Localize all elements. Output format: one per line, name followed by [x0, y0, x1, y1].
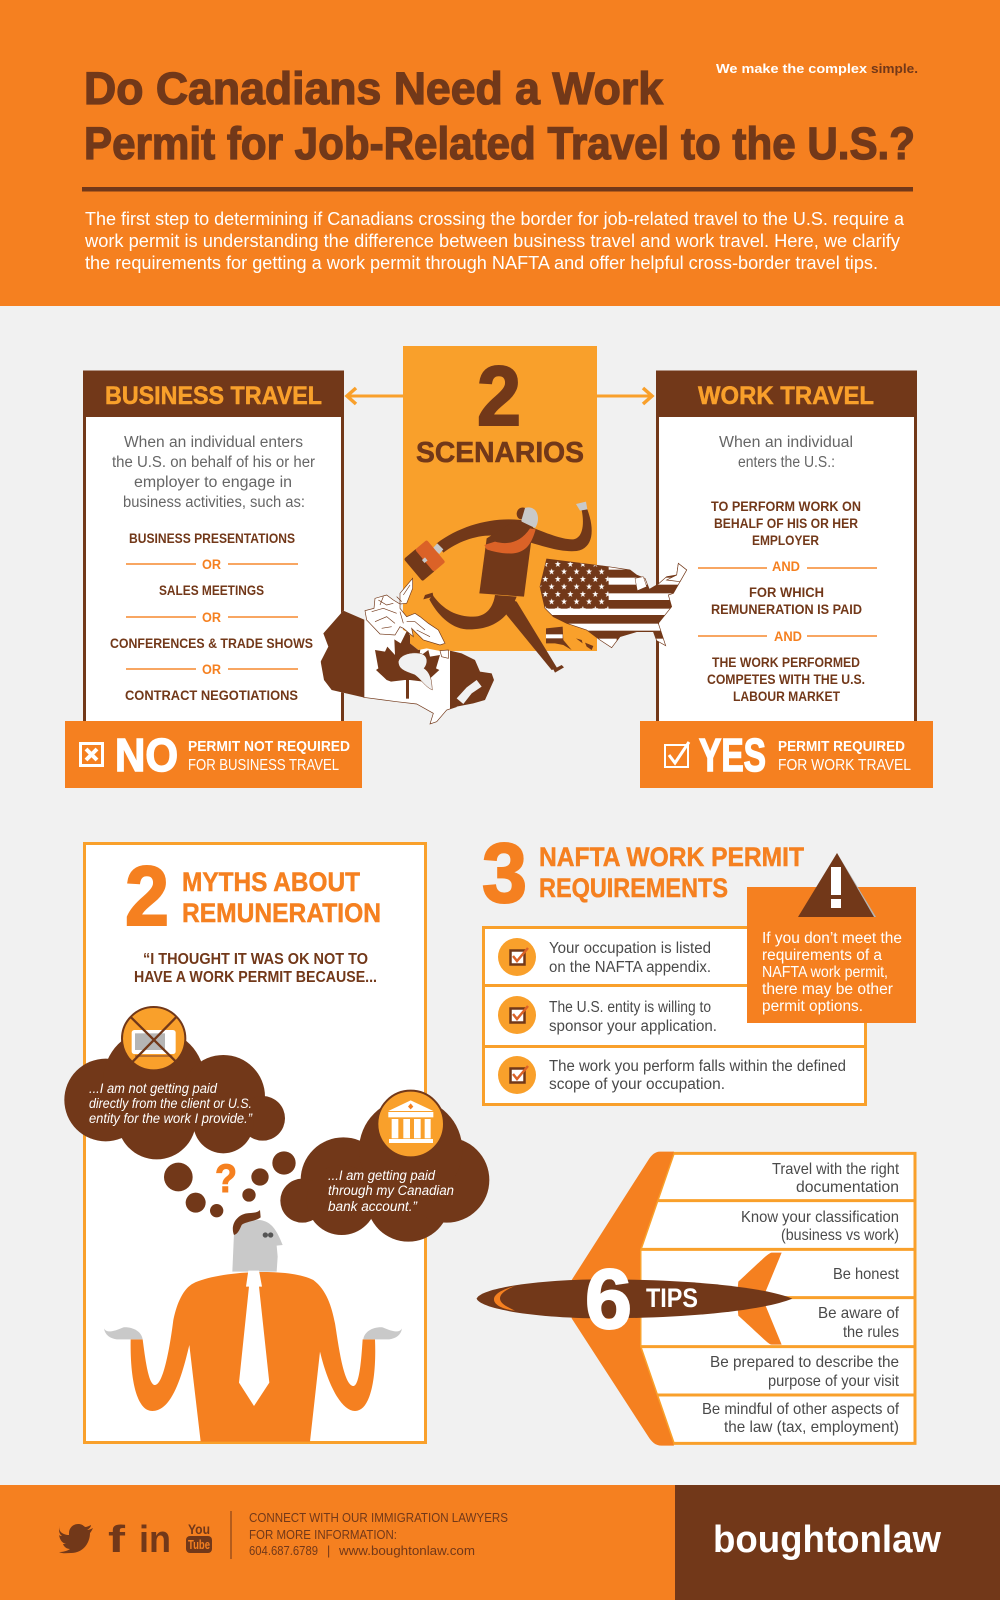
tip four: Be aware of	[818, 1305, 900, 1322]
myths quote: “I THOUGHT IT WAS OK NOT TO	[143, 951, 368, 968]
illustration: canada flag map	[317, 578, 500, 727]
myths quote	[134, 951, 377, 986]
number 6: 6	[585, 1252, 632, 1346]
right arm	[527, 509, 592, 551]
tagline: We make the complex	[716, 61, 868, 76]
panel: myths about remuneration	[84, 844, 426, 1442]
callout text: requirements of a	[762, 947, 882, 964]
no label: NO	[115, 729, 178, 781]
cloud: myth one	[64, 1029, 285, 1159]
work travel conditions: COMPETES WITH THE U.S.	[707, 672, 865, 687]
icon: youtube: Tube	[188, 1537, 210, 1552]
icon: youtube	[186, 1521, 212, 1553]
heading: business travel: BUSINESS TRAVEL	[105, 382, 322, 410]
myths heading	[182, 867, 381, 928]
icon: twitter	[59, 1524, 93, 1553]
left hand	[104, 1327, 143, 1339]
contact text: 604.687.6789	[249, 1544, 318, 1558]
icon: check box	[665, 742, 689, 767]
business activities list: BUSINESS PRESENTATIONS	[129, 531, 295, 546]
business travel description	[112, 434, 315, 511]
tip five: Be prepared to describe the	[710, 1354, 899, 1371]
requirement two: The U.S. entity is willing to	[549, 999, 711, 1016]
tip five: purpose of your visit	[768, 1373, 900, 1390]
illustration: airplane	[477, 1152, 792, 1446]
tip six: the law (tax, employment)	[724, 1419, 899, 1436]
business travel description: the U.S. on behalf of his or her	[112, 454, 315, 471]
hair	[233, 1210, 261, 1235]
yes permit text: PERMIT REQUIRED	[778, 738, 905, 755]
tip six	[702, 1401, 900, 1436]
callout text: there may be other	[762, 981, 893, 998]
business activities list: OR	[202, 662, 221, 677]
icon: warning triangle	[798, 853, 876, 917]
arrow: to business travel	[346, 388, 403, 404]
eyes	[263, 1232, 273, 1238]
illustration: thinking man	[64, 1007, 489, 1442]
work travel conditions: TO PERFORM WORK ON	[711, 499, 861, 514]
business activities list: OR	[202, 610, 221, 625]
work travel description	[719, 434, 853, 471]
business activities list: CONFERENCES & TRADE SHOWS	[110, 636, 313, 651]
yes permit text: FOR WORK TRAVEL	[778, 757, 911, 774]
work travel conditions	[698, 499, 877, 704]
requirement three: The work you perform falls within the defined	[549, 1058, 846, 1075]
business activities list: CONTRACT NEGOTIATIONS	[125, 688, 298, 703]
contact text: www.boughtonlaw.com	[338, 1544, 475, 1558]
nafta heading: REQUIREMENTS	[539, 873, 728, 903]
panel: yes permit	[640, 721, 933, 788]
right hand	[363, 1327, 402, 1339]
panel: nafta requirements	[482, 826, 866, 1104]
work travel conditions: AND	[772, 559, 800, 574]
requirement three: scope of your occupation.	[549, 1076, 725, 1093]
title: Permit for Job-Related Travel to the U.S.?	[84, 118, 915, 169]
left arm	[437, 519, 530, 553]
panel: work travel	[656, 372, 917, 724]
tips rows	[640, 1153, 915, 1443]
contact text: CONNECT WITH OUR IMMIGRATION LAWYERS	[249, 1511, 508, 1525]
torso	[479, 522, 533, 597]
panel: no permit	[65, 721, 362, 788]
work travel conditions: BEHALF OF HIS OR HER	[714, 516, 858, 531]
tagline	[716, 61, 918, 76]
illustration: running businessman	[404, 502, 592, 673]
contact text: |	[327, 1544, 330, 1558]
tips label: TIPS	[646, 1283, 698, 1313]
myth two text: through my Canadian	[328, 1183, 454, 1198]
icon: facebook: f	[108, 1519, 125, 1561]
logo: boughtonlaw	[713, 1519, 941, 1561]
work travel conditions: THE WORK PERFORMED	[712, 655, 860, 670]
callout text	[762, 930, 902, 1015]
requirement one: Your occupation is listed	[549, 940, 711, 957]
arctic islands	[365, 578, 445, 645]
myth one text: directly from the client or U.S.	[89, 1096, 252, 1111]
panel: 2 scenarios	[403, 346, 597, 651]
panel: business travel	[83, 372, 344, 724]
tip one	[772, 1161, 900, 1196]
panel: footer	[0, 1485, 1000, 1600]
intro text: The first step to determining if Canadians crossing the border for job-related travel to the U.S. require a	[85, 208, 905, 229]
myth two text: ...I am getting paid	[328, 1168, 435, 1183]
thought bubbles	[164, 1151, 296, 1217]
title	[84, 63, 915, 169]
head	[520, 507, 538, 528]
work travel conditions: LABOUR MARKET	[733, 689, 841, 704]
business activities list: OR	[202, 557, 221, 572]
no permit text	[188, 738, 350, 774]
illustration: usa flag map	[537, 557, 690, 650]
lower hand	[433, 543, 443, 554]
intro text: the requirements for getting a work permit through NAFTA and offer helpful cross-border travel tips.	[85, 252, 878, 273]
requirement one: on the NAFTA appendix.	[549, 959, 711, 976]
callout text: NAFTA work permit,	[762, 964, 888, 981]
work travel description: When an individual	[719, 434, 853, 451]
tip three: Be honest	[833, 1266, 900, 1283]
requirements table	[483, 928, 866, 1104]
heading: work travel: WORK TRAVEL	[698, 382, 874, 410]
intro text	[84, 208, 905, 273]
front leg	[497, 595, 557, 670]
work travel description: enters the U.S.:	[738, 454, 835, 471]
tip two: Know your classification	[741, 1209, 899, 1226]
requirement three	[498, 1056, 846, 1094]
no permit text: PERMIT NOT REQUIRED	[188, 738, 350, 755]
nafta heading: NAFTA WORK PERMIT	[539, 842, 804, 872]
business travel description: business activities, such as:	[123, 494, 305, 511]
title: Do Canadians Need a Work	[84, 63, 664, 114]
scenarios heading: SCENARIOS	[416, 437, 584, 469]
contact text: FOR MORE INFORMATION:	[249, 1528, 397, 1542]
icon: youtube: You	[188, 1521, 210, 1537]
myth two text: bank account.”	[328, 1199, 417, 1214]
myths heading: REMUNERATION	[182, 898, 381, 928]
tip two: (business vs work)	[781, 1227, 899, 1244]
yes permit text	[778, 738, 911, 774]
myths heading: MYTHS ABOUT	[182, 867, 360, 897]
tip one: Travel with the right	[772, 1161, 900, 1178]
requirement one	[498, 938, 711, 976]
tip two	[741, 1209, 899, 1244]
back leg	[429, 595, 517, 629]
tip six: Be mindful of other aspects of	[702, 1401, 900, 1418]
number 3: 3	[482, 826, 527, 920]
no permit text: FOR BUSINESS TRAVEL	[188, 757, 339, 774]
question mark: ?	[215, 1157, 237, 1201]
work travel conditions: AND	[774, 629, 802, 644]
tie	[239, 1271, 269, 1406]
yes label: YES	[699, 729, 766, 781]
raised hand	[576, 502, 587, 511]
work travel conditions: EMPLOYER	[752, 533, 819, 548]
business travel description: When an individual enters	[124, 434, 303, 451]
intro text: work permit is understanding the difference between business travel and work travel. Here, we clarify	[84, 230, 901, 251]
cloud: myth two	[280, 1098, 489, 1242]
tagline: simple.	[871, 61, 918, 76]
tip four: the rules	[843, 1324, 899, 1341]
nafta heading	[539, 842, 804, 903]
myths quote: HAVE A WORK PERMIT BECAUSE...	[134, 969, 377, 986]
business activities list: SALES MEETINGS	[159, 583, 264, 598]
myth two text	[328, 1168, 454, 1214]
myth one text: entity for the work I provide.”	[89, 1111, 252, 1126]
tip one: documentation	[796, 1179, 899, 1196]
myth one text	[89, 1081, 252, 1126]
requirement two	[498, 996, 717, 1035]
icon: crossed out cheque	[122, 1007, 185, 1070]
callout: other permit options	[747, 853, 916, 1023]
icon: bank	[377, 1091, 444, 1157]
work travel conditions: REMUNERATION IS PAID	[711, 602, 862, 617]
callout text: permit options.	[762, 998, 863, 1015]
requirement two: sponsor your application.	[549, 1018, 717, 1035]
icon: x box	[80, 744, 102, 766]
business travel description: employer to engage in	[134, 474, 292, 491]
tip four	[818, 1305, 900, 1341]
myth one text: ...I am not getting paid	[89, 1081, 217, 1096]
business activities list	[110, 531, 313, 703]
arrow: to work travel	[597, 388, 653, 404]
number 2: 2	[477, 349, 521, 443]
body	[131, 1272, 375, 1442]
head	[232, 1220, 283, 1272]
callout text: If you don’t meet the	[762, 930, 902, 947]
briefcase	[404, 540, 445, 581]
panel: header	[0, 0, 1000, 306]
number 2: 2	[125, 849, 169, 943]
panel: six tips	[477, 1152, 915, 1446]
tie	[484, 528, 536, 553]
work travel conditions: FOR WHICH	[749, 585, 824, 600]
contact text	[249, 1511, 508, 1558]
tip five	[710, 1354, 900, 1390]
icon: linkedin: in	[139, 1519, 171, 1561]
